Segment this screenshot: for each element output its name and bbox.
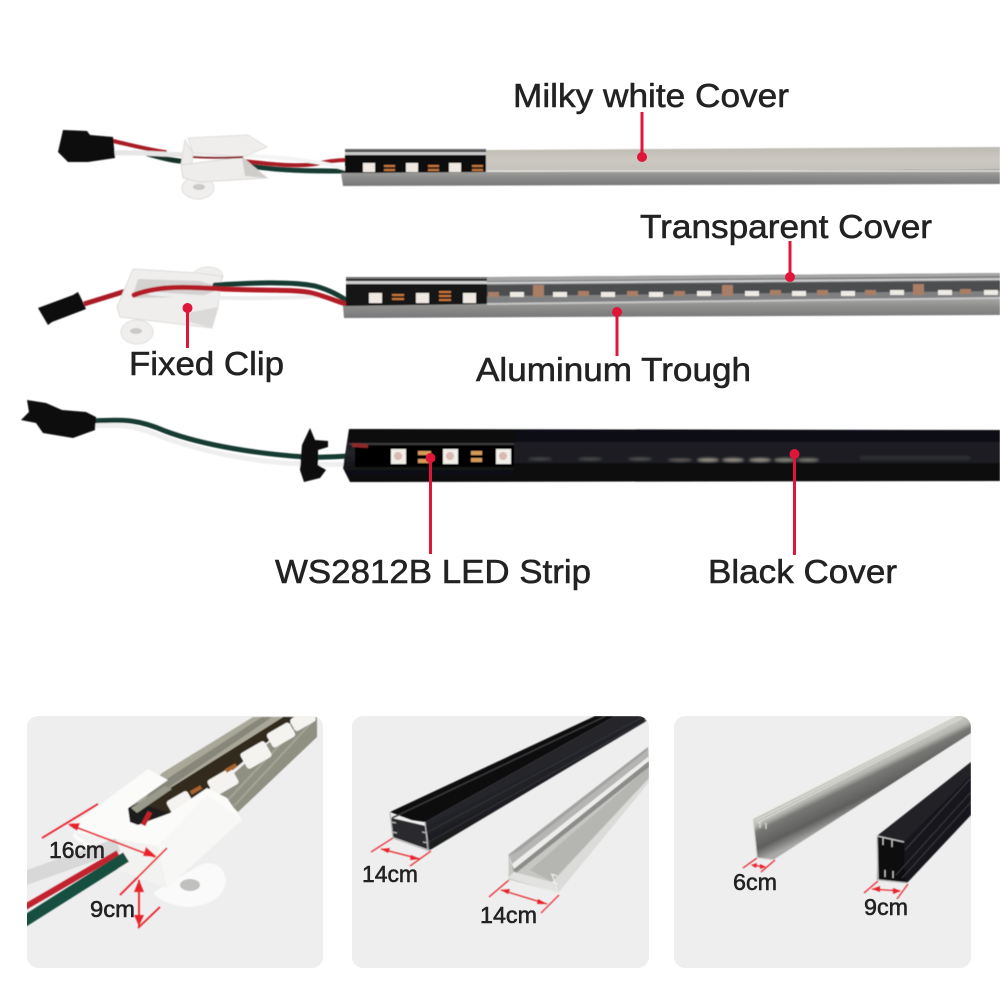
mounting tab, first strip [182,177,214,199]
callout: WS2812B LED strip [275,453,591,590]
silver cover profile [753,716,971,860]
fixed clip, black [300,428,328,482]
callout: WS2812B LED strip: WS2812B LED Strip [275,553,591,590]
clip body [73,770,240,870]
product: black cover strip [21,400,1000,482]
aluminium channel, open section [345,149,486,173]
dimension lines [42,804,167,928]
label: 9cm: 9cm [90,896,135,922]
panel: cover profiles [674,716,971,968]
opening of clip [128,803,170,825]
callout: milky white cover: Milky white Cover [513,77,789,114]
callout: fixed clip: Fixed Clip [129,345,284,382]
LED blocks [166,716,316,812]
silver profile: rounded band [508,747,649,872]
silver profile: wall [508,772,643,886]
LEDs [391,449,511,464]
LEDs [363,163,461,172]
callout: transparent cover: Transparent Cover [640,208,932,245]
callout: black cover: Black Cover [708,553,897,590]
transparent section [487,273,1000,304]
fixed clip, first strip [181,135,267,182]
product: milky white cover strip [58,130,1000,199]
black channel body [343,429,1000,482]
wires [20,845,126,924]
black cover profile [877,762,971,883]
label: 6cm: 6cm [733,869,777,895]
LEDs under transparent cover [510,290,998,297]
wires of first strip [110,141,347,171]
panel: clip dimensions [20,708,323,968]
black profile: end [391,818,430,850]
rail [341,169,1000,186]
label: 14cm right: 14cm [480,902,537,928]
connector [21,400,96,438]
glow under black cover [528,456,970,462]
mounting tab [153,863,226,907]
dimensions [743,858,908,899]
connector [38,292,86,325]
callout: milky white cover [513,77,789,162]
right wall of rail [215,717,317,812]
wires over clip [134,283,349,305]
panel: trough profiles [352,716,649,968]
black profile: outer wall [425,716,645,850]
callout: black cover [708,449,897,590]
red wire to connector [84,291,126,304]
aluminium channel, open section [346,277,487,306]
black cover [514,430,1000,463]
fixed clip, second strip [117,267,223,344]
orange resistors [190,763,237,795]
callout: aluminum trough [476,307,751,388]
silver profile: end [508,872,558,893]
callout: transparent cover [640,208,932,282]
callout: aluminum trough: Aluminum Trough [476,351,751,388]
milky cover [486,147,1000,172]
black profile: top [390,716,615,822]
wires of third strip [93,420,368,464]
label: 14cm left: 14cm [362,861,418,887]
connector [58,130,115,162]
LEDs in open section [369,293,476,303]
label: 9cm: 9cm [864,894,908,920]
silver end ticks [753,819,773,860]
label: 16cm: 16cm [49,837,105,863]
callout: fixed clip [129,303,284,382]
dimensions [371,838,559,913]
product: transparent cover strip [38,267,1000,344]
LED board [147,716,294,818]
left wall of rail [130,717,283,810]
rail [343,298,1000,318]
